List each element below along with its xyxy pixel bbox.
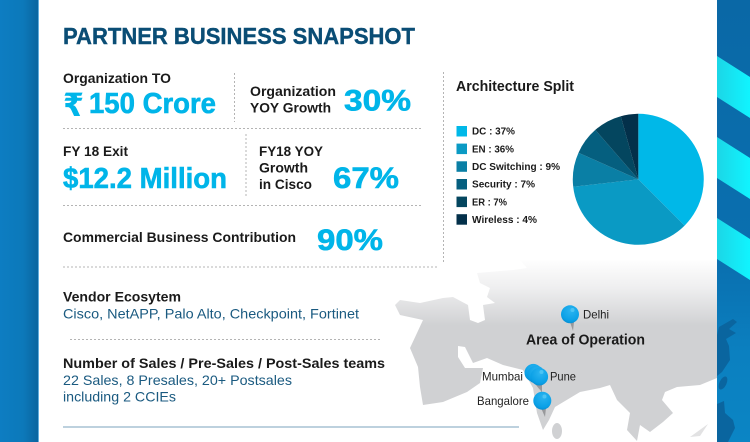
stat: FY 18 exit <box>63 143 227 195</box>
stat: FY18 YOY growth in Cisco: 67% <box>333 162 399 195</box>
stat: FY18 YOY growth in Cisco: FY18 YOY <box>259 143 324 159</box>
stat: organization turnover: 150 Crore <box>89 88 216 120</box>
stat: FY18 YOY growth in Cisco <box>259 143 399 195</box>
left blue band <box>0 0 39 442</box>
legend: architecture split: EN : 36% <box>472 143 515 155</box>
stat: commercial business contribution <box>63 224 383 257</box>
sales teams: 22 Sales, 8 Presales, 20+ Postsales <box>63 372 292 388</box>
heading: architecture split: Architecture Split <box>456 78 574 95</box>
pin: Pune: Pune <box>550 370 576 384</box>
stat: FY 18 exit: $12.2 Million <box>63 163 227 195</box>
stat: commercial business contribution: 90% <box>317 224 383 257</box>
legend: architecture split: Wireless : 4% <box>472 214 538 226</box>
stat: commercial business contribution: Commercial Business Contribution <box>63 229 296 245</box>
sales teams: Number of Sales / Pre-Sales / Post-Sales teams <box>63 355 385 371</box>
stat: organization YOY growth: Organization <box>250 83 336 99</box>
legend: architecture split: DC Switching : 9% <box>472 161 561 173</box>
legend: architecture split <box>456 126 561 226</box>
stat: organization turnover <box>63 70 216 124</box>
pin: Mumbai: Mumbai <box>482 370 523 384</box>
stat: organization YOY growth: 30% <box>344 84 411 118</box>
map of Asia <box>395 260 717 441</box>
pin: Pune <box>527 366 576 393</box>
pin: Delhi: Delhi <box>583 308 609 322</box>
stat: organization turnover: ₹ <box>63 86 84 124</box>
legend: architecture split: DC : 37% <box>472 126 516 138</box>
vendor ecosystem <box>63 288 359 322</box>
stat: organization turnover: Organization TO <box>63 70 171 86</box>
legend: architecture split: ER : 7% <box>472 196 508 208</box>
right blue band with chevrons <box>717 0 750 442</box>
stat: FY18 YOY growth in Cisco: in Cisco <box>259 176 312 192</box>
stat: organization YOY growth <box>250 83 411 118</box>
stat: FY 18 exit: FY 18 Exit <box>63 143 128 159</box>
title: PARTNER BUSINESS SNAPSHOT <box>63 23 415 49</box>
stat: organization YOY growth: YOY Growth <box>250 100 331 116</box>
pin: Bangalore: Bangalore <box>477 394 529 408</box>
stat: FY18 YOY growth in Cisco: Growth <box>259 160 308 176</box>
legend: architecture split: Security : 7% <box>472 179 536 191</box>
pin: Mumbai <box>482 364 542 390</box>
vendor ecosystem: Vendor Ecosytem <box>63 288 181 304</box>
pin: Bangalore <box>477 392 551 417</box>
sales teams: including 2 CCIEs <box>63 388 176 404</box>
pie chart: architecture split <box>573 114 704 245</box>
heading: area of operation: Area of Operation <box>526 332 645 348</box>
vendor ecosystem: Cisco, NetAPP, Palo Alto, Checkpoint, Fortinet <box>63 306 359 322</box>
sales teams <box>63 355 385 404</box>
pin: Delhi <box>561 305 609 331</box>
